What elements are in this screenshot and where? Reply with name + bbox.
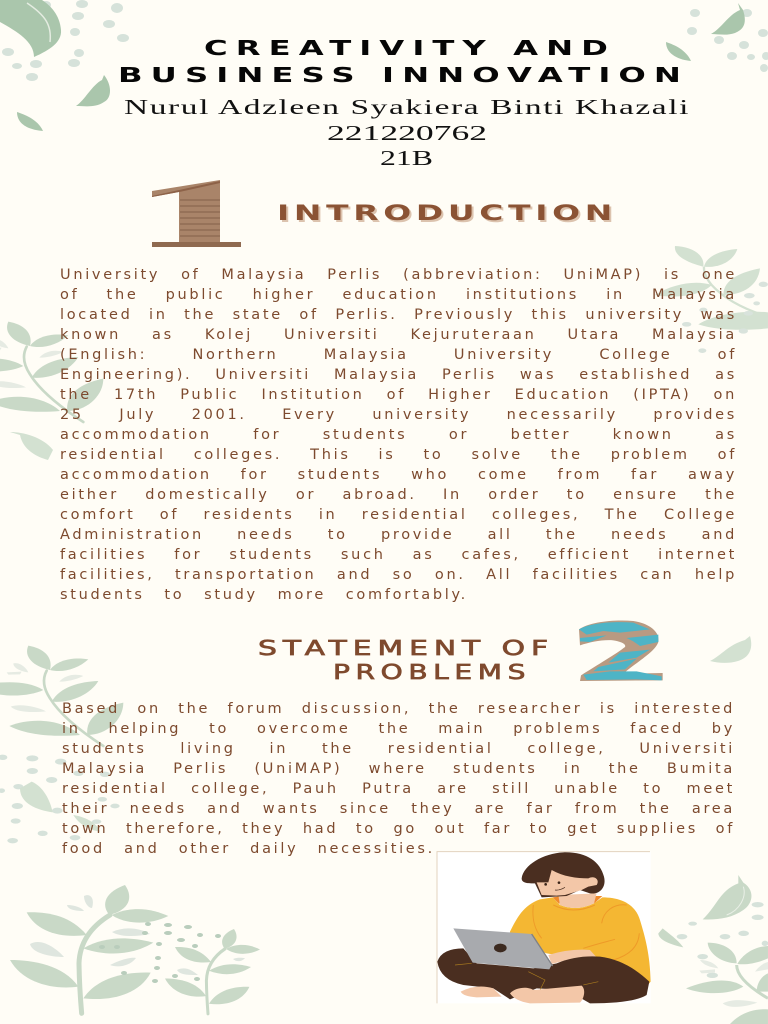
decorative leaf: left middle xyxy=(10,432,53,460)
feet xyxy=(461,986,502,997)
illustration: girl with laptop xyxy=(437,852,651,1003)
decorative plant: left middle xyxy=(0,322,103,422)
body text: introduction: Administration needs to provide all the needs and xyxy=(60,527,737,543)
heading: statement of problems xyxy=(258,636,554,684)
decorative dots: left lower xyxy=(0,755,120,843)
body text: statement of problems xyxy=(62,701,735,857)
body text: introduction: accommodation for students who come from far away xyxy=(60,467,737,483)
author details: 21B xyxy=(380,146,433,170)
body text: introduction: known as Kolej Universiti Kejuruteraan Utara Malaysia xyxy=(60,327,737,343)
decorative leaf: left lower xyxy=(20,782,100,832)
body text: statement of problems: their needs and wants since they are far from the area xyxy=(62,801,735,817)
sweater xyxy=(510,897,651,988)
body text: introduction xyxy=(60,267,737,603)
neck and collar xyxy=(553,896,602,904)
hair xyxy=(522,852,605,897)
body text: introduction: either domestically or abroad. In order to ensure the xyxy=(60,487,737,503)
heading: statement of problems: PROBLEMS xyxy=(333,660,531,684)
trousers xyxy=(437,948,649,1003)
body text: statement of problems: in helping to overcome the main problems faced by xyxy=(62,721,735,737)
body text: introduction: located in the state of Perlis. Previously this university was xyxy=(60,307,737,323)
decorative plant: upper right xyxy=(655,246,768,353)
body text: introduction: facilities, transportation and so on. All facilities can help xyxy=(60,567,737,583)
laptop xyxy=(453,928,552,969)
decorative leaves: top left xyxy=(0,0,110,131)
face xyxy=(537,870,598,896)
body text: introduction: facilities for students such as cafes, efficient internet xyxy=(60,547,737,563)
body text: statement of problems: Malaysia Perlis (UniMAP) where students in the Bumita xyxy=(62,761,735,777)
heading: introduction xyxy=(277,201,619,227)
number 1 xyxy=(152,180,241,247)
decorative dots: top left xyxy=(2,0,129,81)
body text: introduction: Engineering). Universiti Malaysia Perlis was established as xyxy=(60,367,737,383)
body text: introduction: University of Malaysia Perlis (abbreviation: UniMAP) is one xyxy=(60,267,737,283)
body text: introduction: residential colleges. This is to solve the problem of xyxy=(60,447,737,463)
body text: introduction: accommodation for students or better known as xyxy=(60,427,737,443)
author details: Nurul Adzleen Syakiera Binti Khazali xyxy=(124,95,690,119)
body text: introduction: comfort of residents in residential colleges, The College xyxy=(60,507,737,523)
body text: introduction: (English: Northern Malaysia University College of xyxy=(60,347,737,363)
body text: statement of problems: food and other daily necessities. xyxy=(62,841,435,857)
author details: 221220762 xyxy=(327,121,487,145)
heading: statement of problems: STATEMENT OF xyxy=(258,636,554,660)
number 2 xyxy=(579,621,663,681)
decorative leaves and dots: top right xyxy=(666,3,768,72)
body text: introduction: of the public higher education institutions in Malaysia xyxy=(60,287,737,303)
title: CREATIVITY AND xyxy=(204,36,616,60)
decorative dots: bottom xyxy=(99,922,221,983)
heading: introduction: INTRODUCTION xyxy=(277,201,617,225)
body text: statement of problems: students living in the residential college, Universiti xyxy=(62,741,735,757)
body text: statement of problems: residential college, Pauh Putra are still unable to meet xyxy=(62,781,735,797)
body text: statement of problems: Based on the forum discussion, the researcher is interested xyxy=(62,701,735,717)
decorative leaves and plant: bottom right xyxy=(658,875,768,1024)
title: BUSINESS INNOVATION xyxy=(118,63,689,87)
decorative leaf: right of heading two xyxy=(710,636,751,663)
body text: introduction: students to study more comfortably. xyxy=(60,587,468,603)
body text: introduction: 25 July 2001. Every university necessarily provides xyxy=(60,407,737,423)
hand xyxy=(548,950,596,964)
body text: statement of problems: town therefore, they had to go out far to get supplies of xyxy=(62,821,735,837)
title xyxy=(118,36,689,87)
decorative plant: left lower xyxy=(0,646,123,746)
body text: introduction: the 17th Public Institution of Higher Education (IPTA) on xyxy=(60,387,737,403)
decorative plants: bottom left xyxy=(10,885,260,1014)
heading: introduction: INTRODUCTION xyxy=(279,203,619,227)
author details xyxy=(124,95,690,170)
